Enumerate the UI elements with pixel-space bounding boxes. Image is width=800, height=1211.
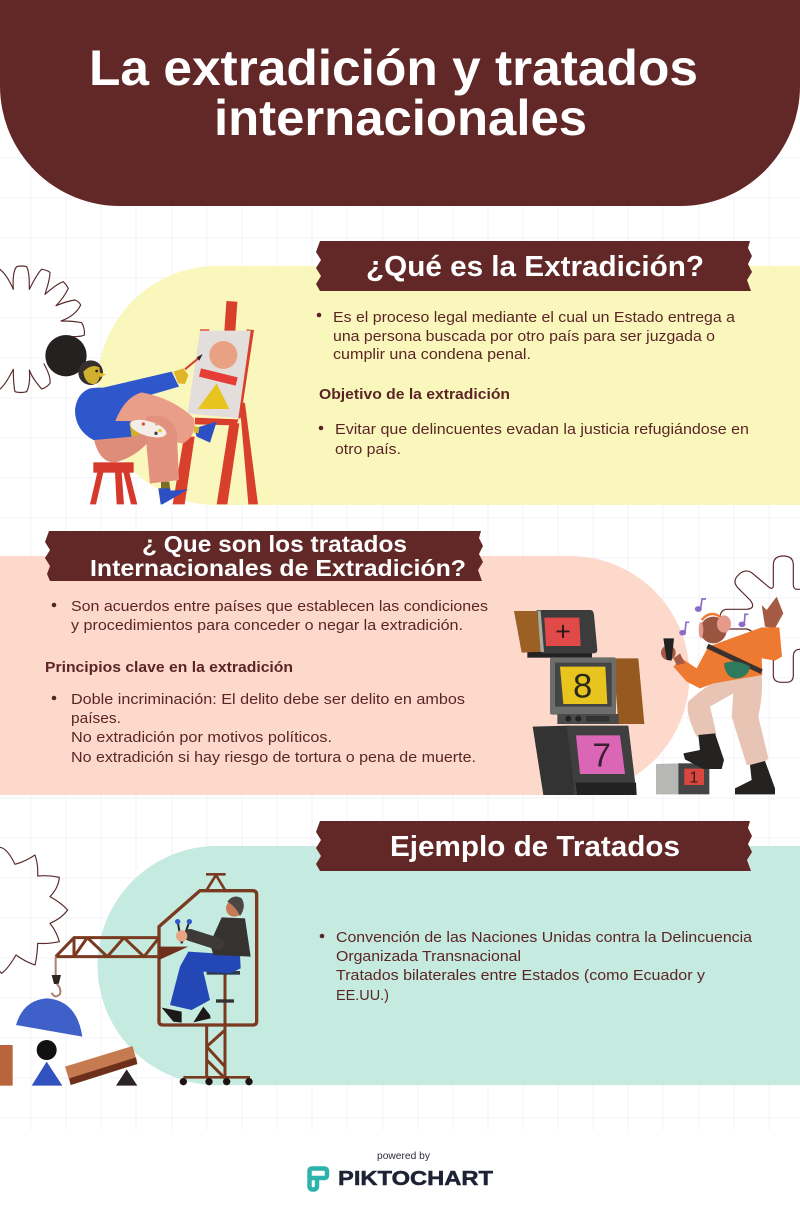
ribbon heading: ejemplo de tratados	[316, 821, 752, 871]
crane load and hook	[16, 975, 82, 1037]
principles text	[52, 691, 476, 766]
principles text: Doble incriminación: El delito debe ser delito en ambos	[71, 691, 465, 708]
stacked blocks	[0, 1040, 137, 1086]
ribbon heading: ejemplo de tratados: Ejemplo de Tratados	[390, 831, 680, 863]
television eight	[550, 657, 644, 724]
examples text: Organizada Transnacional	[336, 948, 521, 965]
operator figure	[162, 896, 251, 1023]
subheading: objetivo: Objetivo de la extradición	[319, 386, 510, 403]
icon: piktochart logo	[310, 1168, 327, 1190]
objective text	[319, 421, 749, 458]
subheading: principios clave: Principios clave en la extradición	[45, 659, 293, 676]
crane structure	[56, 874, 257, 1078]
television eight: 8	[573, 667, 592, 705]
television one	[656, 763, 709, 794]
television one: 1	[690, 769, 699, 786]
television plus	[514, 610, 597, 658]
canvas painting	[188, 331, 251, 418]
television seven: 7	[592, 738, 611, 775]
treaties definition text	[52, 598, 488, 634]
panel: tratados internacionales	[0, 531, 690, 795]
ribbon heading: tratados internacionales: ¿ Que son los tratados	[142, 531, 407, 557]
wordmark: PIKTOCHART	[338, 1168, 493, 1190]
principles text: países.	[71, 710, 121, 727]
powered by: powered by	[377, 1150, 431, 1162]
music notes	[680, 599, 748, 635]
title banner	[0, 0, 800, 206]
examples text	[320, 929, 753, 1004]
squiggle outline	[0, 847, 68, 973]
treaties definition text: y procedimientos para conceder o negar la extradición.	[71, 617, 463, 634]
squiggle outline	[0, 266, 84, 392]
illustration: crane operator	[0, 847, 257, 1086]
objective text: otro país.	[335, 441, 401, 458]
panel: ejemplo de tratados	[98, 821, 800, 1085]
definition text: una persona buscada por otro país para ser juzgada o	[333, 328, 715, 345]
painter figure	[45, 335, 217, 504]
principles text: No extradición por motivos políticos.	[71, 729, 332, 746]
examples text: Tratados bilaterales entre Estados (como Ecuador y	[336, 967, 706, 984]
ribbon heading: qué es la extradición	[316, 241, 752, 291]
definition text: Es el proceso legal mediante el cual un Estado entrega a	[333, 309, 736, 326]
definition text: cumplir una condena penal.	[333, 346, 531, 363]
title: La extradición y tratados	[89, 40, 698, 96]
panel: qué es la extradición	[98, 241, 800, 505]
illustration: painter at easel	[0, 266, 258, 504]
ribbon heading: tratados internacionales: Internacionales de Extradición?	[90, 555, 466, 581]
title: internacionales	[214, 90, 587, 146]
squiggle outline	[720, 556, 800, 682]
examples text: EE.UU.)	[336, 987, 389, 1004]
title	[89, 40, 698, 146]
ribbon heading: qué es la extradición: ¿Qué es la Extradición?	[366, 251, 704, 283]
examples text: Convención de las Naciones Unidas contra la Delincuencia	[336, 929, 753, 946]
footer: powered by piktochart	[0, 1131, 800, 1211]
easel	[173, 301, 258, 504]
objective text: Evitar que delincuentes evadan la justicia refugiándose en	[335, 421, 749, 438]
television plus: +	[555, 617, 571, 647]
stool	[90, 462, 137, 504]
ribbon heading: tratados internacionales	[45, 531, 483, 581]
principles text: No extradición si hay riesgo de tortura o pena de muerte.	[71, 749, 476, 766]
illustration: dancer and televisions	[514, 556, 800, 795]
dancer figure	[661, 597, 783, 794]
television seven	[533, 726, 637, 795]
treaties definition text: Son acuerdos entre países que establecen las condiciones	[71, 598, 488, 615]
definition text	[317, 309, 736, 363]
